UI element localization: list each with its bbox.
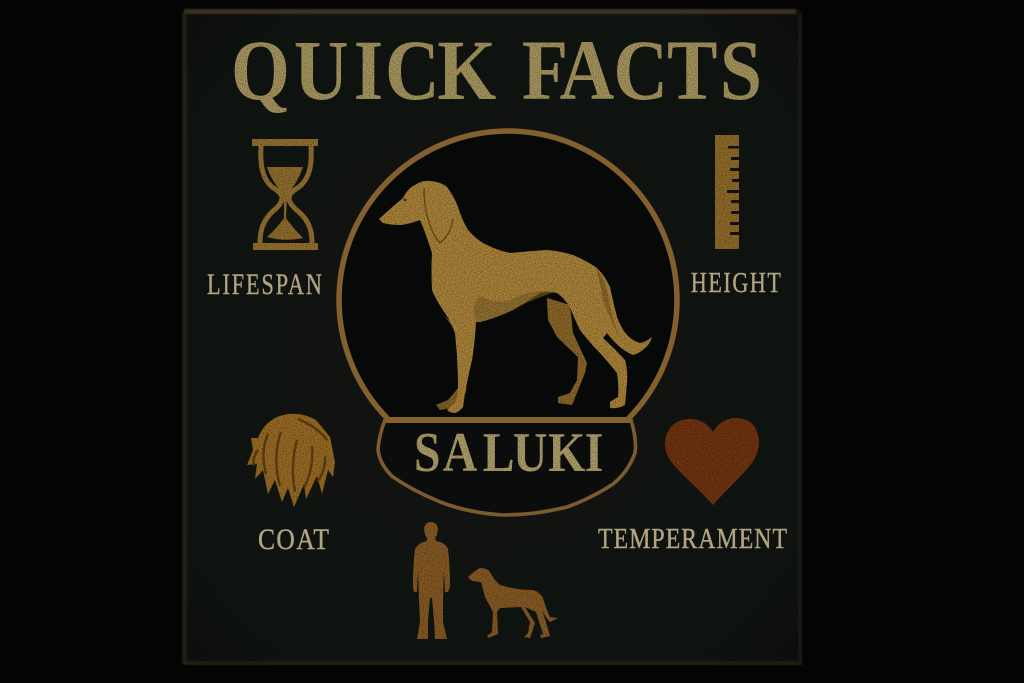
name plaque — [378, 420, 636, 515]
far legs — [436, 315, 470, 410]
label: coat: COAT — [258, 523, 329, 557]
title — [231, 23, 762, 118]
icon: ruler — [715, 135, 740, 249]
title: QUICK — [231, 23, 496, 118]
icon: hourglass — [252, 139, 318, 250]
title: FACTS — [522, 23, 762, 118]
label: temperament: TEMPERAMENT — [598, 522, 787, 555]
icon: heart — [665, 418, 759, 505]
belly shading — [474, 291, 555, 322]
icon: coat fur tuft — [247, 414, 335, 507]
icon: person and dog size comparison — [413, 522, 558, 639]
label: height: HEIGHT — [691, 266, 781, 299]
main body — [379, 181, 652, 413]
panel: central medallion — [339, 131, 677, 515]
ear lines — [424, 188, 453, 243]
small dog — [468, 568, 558, 638]
panel: board — [182, 9, 802, 665]
haunch and tail shading — [596, 268, 620, 338]
eye — [403, 199, 407, 201]
medallion circle — [339, 131, 677, 466]
name label: SALUKI — [414, 423, 603, 484]
label: lifespan: LIFESPAN — [207, 267, 322, 301]
person — [413, 522, 450, 639]
dog illustration — [379, 181, 652, 413]
